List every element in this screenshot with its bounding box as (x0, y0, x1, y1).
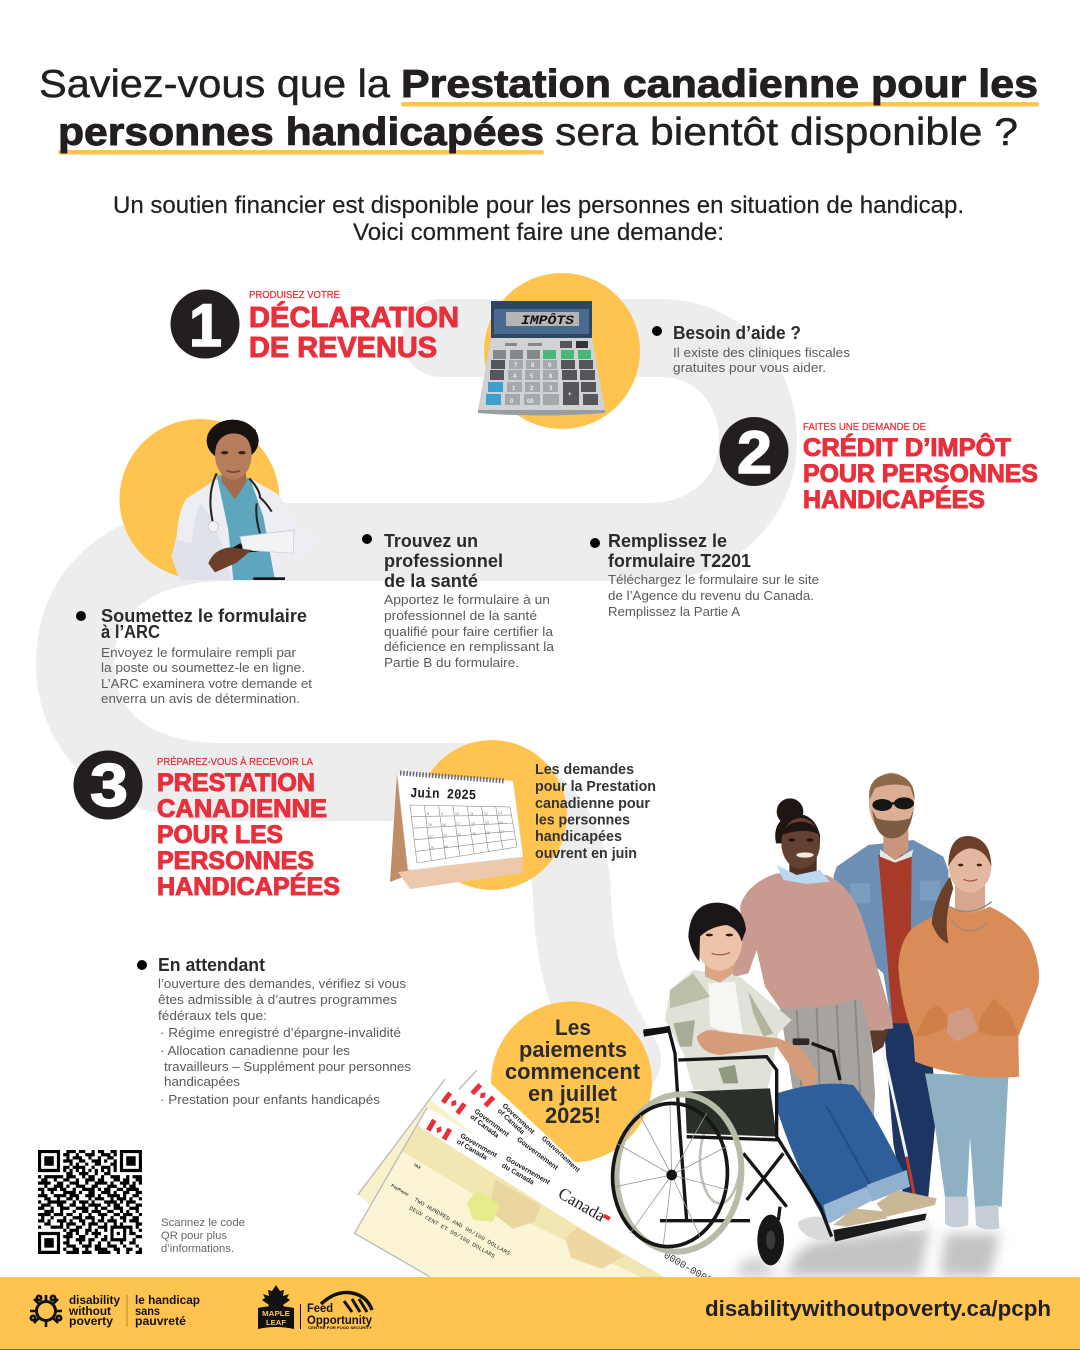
wheelchair front caster (757, 1215, 784, 1265)
QR caption (161, 1217, 245, 1255)
icon: calculator on yellow circle: 00 (527, 399, 534, 405)
step: submit to CRA: à l’ARC (101, 622, 160, 642)
icon: desk calendar June 2025 on yellow circle: 22 (429, 835, 433, 839)
step: find health professional: qualifié pour faire certifier la (384, 624, 554, 639)
icon: calculator on yellow circle: 9 (548, 363, 552, 369)
photo: group of four people with disabilities (608, 773, 1039, 1277)
cheque: back: Gouvernement (540, 1135, 581, 1174)
logo: disability without poverty: sans (135, 1304, 160, 1318)
text block: meanwhile: travailleurs – Supplément pour personnes (164, 1059, 412, 1074)
callout circle: payments start July 2025: paiements (519, 1037, 627, 1062)
step: submit to CRA: Soumettez le formulaire (101, 606, 307, 626)
icon: calculator on yellow circle: 6 (549, 374, 553, 380)
icon: desk calendar June 2025 on yellow circle: 18 (471, 822, 475, 826)
cheque: front: du Canada (500, 1162, 535, 1186)
step: find health professional: de la santé (384, 571, 478, 591)
step: fill out form T2201: formulaire T2201 (608, 551, 751, 571)
step 2 heading: FAITES UNE DEMANDE DE (803, 422, 926, 433)
icon: desk calendar June 2025 on yellow circle: 24 (457, 833, 461, 837)
icon: desk calendar June 2025 on yellow circle: 11 (470, 812, 474, 816)
step 1 heading: DE REVENUS (249, 332, 437, 364)
logo: disability without poverty: without (68, 1304, 111, 1318)
title: Prestation canadienne pour les (401, 63, 1038, 106)
QR caption: QR pour plus (161, 1230, 228, 1242)
icon: desk calendar June 2025 on yellow circle: 16 (442, 823, 446, 827)
icon: desk calendar June 2025 on yellow circle: 12 (484, 812, 488, 816)
icon: calculator on yellow circle: IMPÔTS (521, 313, 574, 328)
title: sera bientôt disponible ? (555, 111, 1018, 154)
title: Saviez-vous que la (39, 63, 390, 106)
step 3 number badge (74, 750, 142, 820)
icon: desk calendar June 2025 on yellow circle: 20 (499, 821, 503, 825)
step: submit to CRA (76, 606, 312, 706)
cheque: back (378, 1070, 698, 1350)
intro text (113, 192, 964, 246)
icon: desk calendar June 2025 on yellow circle (390, 740, 567, 890)
step 2 heading: HANDICAPÉES (803, 485, 985, 514)
icon: desk calendar June 2025 on yellow circle: 29 (430, 846, 434, 850)
icon: desk calendar June 2025 on yellow circle: 27 (500, 830, 504, 834)
step 2 heading: POUR PERSONNES (803, 460, 1038, 488)
icon: calculator on yellow circle: 5 (530, 374, 534, 380)
step 3 heading: PRESTATION (157, 769, 315, 797)
step: fill out form T2201: Remplissez le (608, 531, 727, 551)
callout: applications open in June: handicapées (535, 828, 622, 845)
callout: applications open in June: pour la Prestation (535, 778, 656, 795)
text block: meanwhile: · Prestation pour enfants handicapés (160, 1092, 381, 1107)
icon: desk calendar June 2025 on yellow circle: 9 (441, 812, 443, 816)
step: find health professional: déficience en remplissant la (384, 639, 555, 654)
icon: calculator on yellow circle: 0 (510, 399, 514, 405)
icon: calculator on yellow circle: 1 (512, 386, 516, 392)
cheque: front: of Canada (455, 1139, 488, 1162)
wheelchair main wheel (608, 1090, 747, 1256)
QR caption: d’informations. (161, 1243, 234, 1255)
cheque: front: Pay/Payez (390, 1183, 410, 1197)
logo: Feed Opportunity (307, 1292, 372, 1330)
footer bar (0, 1277, 1080, 1350)
cheque: front (354, 1105, 722, 1350)
callout circle: payments start July 2025: commencent (505, 1059, 641, 1084)
cheque: back: Government (501, 1103, 536, 1136)
text block: meanwhile: · Régime enregistré d’épargne-invalidité (160, 1025, 401, 1040)
callout: applications open in June: les personnes (535, 812, 630, 828)
icon: desk calendar June 2025 on yellow circle: 10 (455, 812, 459, 816)
step 2 heading (803, 422, 1038, 514)
woman in orange sweatshirt (898, 836, 1039, 1229)
step: submit to CRA: L’ARC examinera votre demande et (101, 676, 312, 691)
icon: calculator on yellow circle: + (568, 392, 572, 398)
cheque: middle: Gouvernement (515, 1136, 559, 1172)
step 1 number badge: 1 (189, 292, 222, 359)
title: personnes handicapées (58, 111, 544, 154)
logo: Feed Opportunity: Feed (307, 1301, 333, 1315)
icon: calculator on yellow circle: 8 (531, 363, 535, 369)
text block: meanwhile: · Allocation canadienne pour les (160, 1043, 351, 1058)
icon: desk calendar June 2025 on yellow circle: 8 (427, 812, 429, 816)
callout: applications open in June: canadienne pour (535, 795, 650, 812)
callout: applications open in June: ouvrent en juin (535, 845, 637, 862)
step: submit to CRA: enverra un avis de détermination. (101, 691, 300, 706)
text block: meanwhile: êtes admissible à d’autres programmes (158, 992, 398, 1007)
cheque: front: Government (459, 1133, 499, 1160)
icon: calculator on yellow circle: 2 (530, 386, 534, 392)
QR caption: Scannez le code (161, 1217, 245, 1229)
text block: meanwhile: handicapées (164, 1074, 241, 1089)
icon: desk calendar June 2025 on yellow circle: 26 (486, 831, 490, 835)
callout circle: payments start July 2025 (491, 1002, 652, 1162)
step: find health professional (362, 531, 555, 670)
step 3 heading (157, 755, 340, 901)
icon: calculator on yellow circle: 3 (549, 386, 553, 392)
logo: Feed Opportunity: Opportunity (307, 1313, 372, 1327)
cheque: middle: of Canada (469, 1114, 500, 1140)
Government of Canada cheques (354, 1070, 722, 1350)
icon: calculator on yellow circle (478, 273, 640, 429)
step: fill out form T2201: de l’Agence du revenu du Canada. (608, 588, 814, 603)
cheque: middle: Government (473, 1108, 510, 1139)
logo: disability without poverty: disability (69, 1293, 120, 1307)
callout: applications open in June: Les demandes (535, 761, 634, 778)
logo: disability without poverty: pauvreté (135, 1314, 186, 1328)
cheque: back: of Canada (496, 1108, 525, 1136)
intro text: Un soutien financier est disponible pour les personnes en situation de handicap. (113, 192, 964, 219)
note: help: Il existe des cliniques fiscales (673, 345, 851, 360)
woman in pink sweater (732, 798, 893, 1130)
logo: Maple Leaf: MAPLE (262, 1311, 290, 1318)
text block: meanwhile (137, 955, 412, 1107)
callout: applications open in June (535, 761, 656, 862)
logo: disability without poverty: poverty (69, 1314, 113, 1328)
callout circle: payments start July 2025: en juillet (528, 1081, 618, 1106)
step: find health professional: professionnel de la santé (384, 608, 537, 623)
step 1 heading (249, 290, 459, 364)
callout circle: payments start July 2025: Les (555, 1015, 591, 1040)
intro text: Voici comment faire une demande: (353, 219, 724, 246)
step 2 heading: CRÉDIT D’IMPÔT (803, 432, 1011, 462)
logo: Maple Leaf (258, 1285, 294, 1329)
step 1 heading: DÉCLARATION (249, 300, 459, 334)
callout circle: payments start July 2025: 2025! (545, 1103, 601, 1128)
icon: desk calendar June 2025 on yellow circle: 25 (472, 832, 476, 836)
logo: disability without poverty: le handicap (135, 1293, 200, 1307)
step: find health professional: Trouvez un (384, 531, 478, 551)
text block: meanwhile: l’ouverture des demandes, vérifiez si vous (158, 976, 407, 991)
icon: desk calendar June 2025 on yellow circle: 15 (428, 823, 432, 827)
step: find health professional: Apportez le formulaire à un (384, 592, 550, 607)
step 2 number badge (720, 417, 788, 486)
man with sunglasses and white cane (833, 773, 950, 1231)
step: fill out form T2201: Téléchargez le formulaire sur le site (608, 572, 819, 587)
step 3 heading: PRÉPAREZ-VOUS À RECEVOIR LA (157, 755, 313, 768)
cheque: front: Canada (555, 1184, 609, 1226)
doctor photo on yellow circle (120, 419, 317, 580)
serpentine grey path (75, 338, 758, 1060)
step 3 heading: HANDICAPÉES (157, 872, 340, 901)
step: fill out form T2201 (590, 531, 819, 619)
text block: meanwhile: En attendant (158, 955, 265, 975)
title (39, 63, 1039, 154)
icon: desk calendar June 2025 on yellow circle: 13 (498, 811, 502, 815)
step: find health professional: Partie B du formulaire. (384, 655, 519, 670)
icon: desk calendar June 2025 on yellow circle: 30 (444, 845, 448, 849)
cheque: middle (358, 1079, 708, 1350)
step 1 number badge (170, 290, 240, 359)
step 3 number badge: 3 (90, 752, 128, 819)
man in wheelchair (608, 903, 937, 1265)
note: help: gratuites pour vous aider. (673, 360, 826, 375)
website URL: disabilitywithoutpoverty.ca/pcph (705, 1296, 1051, 1321)
cheque: front: 0000-00005 (661, 1251, 719, 1290)
cheque: front: Gouvernement (504, 1156, 551, 1187)
step 1 heading: PRODUISEZ VOTRE (249, 290, 340, 301)
text block: meanwhile: fédéraux tels que: (158, 1008, 267, 1023)
note: help (652, 323, 851, 375)
step: fill out form T2201: Remplissez la Partie A (608, 604, 740, 619)
step 2 number badge: 2 (737, 419, 772, 486)
step 3 heading: POUR LES (157, 821, 283, 849)
icon: calculator on yellow circle: 4 (513, 374, 517, 380)
note: help: Besoin d’aide ? (673, 323, 801, 343)
QR code (38, 1152, 142, 1252)
icon: desk calendar June 2025 on yellow circle: 19 (485, 821, 489, 825)
step: find health professional: professionnel (384, 551, 503, 571)
step: submit to CRA: la poste ou soumettez-le en ligne. (101, 660, 305, 675)
logo: Feed Opportunity: CENTRE FOR FOOD SECURITY (308, 1325, 372, 1330)
icon: desk calendar June 2025 on yellow circle: 23 (443, 834, 447, 838)
logo: disability without poverty (30, 1293, 200, 1328)
cheque: front: DEUX CENT ET 00/100 DOLLARS (408, 1205, 497, 1260)
icon: desk calendar June 2025 on yellow circle: Juin 2025 (410, 786, 476, 804)
step: submit to CRA: Envoyez le formulaire rempli par (101, 645, 297, 660)
ground shadow (735, 1227, 1000, 1277)
cheque: front: TAX (413, 1162, 422, 1170)
icon: desk calendar June 2025 on yellow circle: 17 (456, 822, 460, 826)
step 3 heading: CANADIENNE (157, 795, 327, 823)
step 3 heading: PERSONNES (157, 847, 314, 875)
logo: Maple Leaf: LEAF (266, 1320, 287, 1327)
icon: calculator on yellow circle: 7 (514, 363, 518, 369)
cheque: front: TWO HUNDRED AND 00/100 DOLLARS (413, 1196, 512, 1258)
